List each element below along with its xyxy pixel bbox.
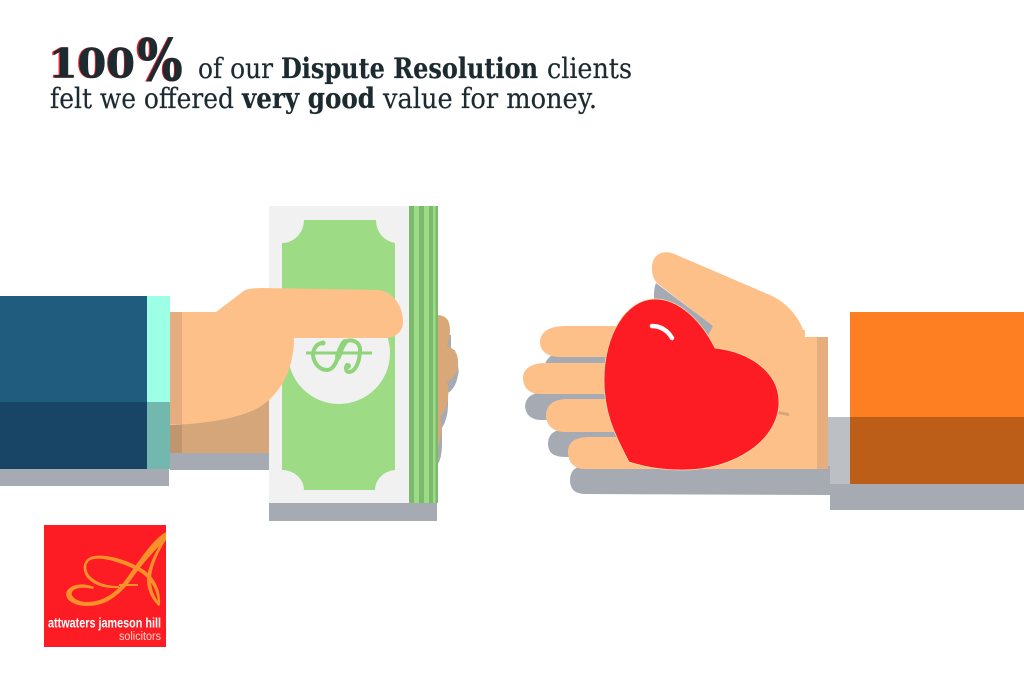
logo descriptor: solicitors	[119, 631, 161, 643]
big number: %	[138, 27, 182, 94]
note edges	[409, 206, 438, 503]
note medallion	[288, 302, 390, 404]
headline	[48, 27, 632, 115]
headline line one: Dispute Resolution	[281, 52, 538, 85]
heart highlight	[652, 326, 672, 338]
right sleeve	[850, 312, 1024, 484]
left sleeve	[0, 296, 147, 469]
right hand	[523, 252, 828, 469]
left hand fingers behind banknote	[437, 315, 459, 466]
left cuff	[147, 296, 170, 469]
logo background	[44, 525, 166, 647]
hand shadow left	[170, 453, 270, 470]
headline line two: very good	[241, 82, 375, 115]
headline line two: value for money.	[382, 82, 597, 115]
big number red offset	[48, 27, 182, 94]
headline line one: of our	[198, 52, 274, 85]
sleeve shadow left	[0, 469, 169, 486]
big number red offset: 100	[48, 40, 134, 88]
heart	[604, 299, 779, 470]
logo firm name: attwaters jameson hill	[48, 616, 161, 630]
big number red offset: %	[136, 27, 182, 94]
note paper	[269, 206, 409, 503]
dollar sign	[306, 340, 372, 372]
headline line one: clients	[547, 52, 632, 85]
note shadow	[269, 503, 437, 521]
big number	[49, 27, 182, 94]
right hand shadows	[525, 283, 830, 495]
big number: 100	[49, 40, 135, 88]
hand underside	[170, 400, 270, 453]
logo monogram A	[66, 532, 166, 606]
note green face	[282, 220, 395, 490]
right sleeve shadow	[828, 417, 1024, 510]
headline line two: felt we offered	[50, 82, 234, 115]
logo	[44, 525, 166, 647]
banknote stack	[269, 206, 438, 521]
left hand pointing finger	[170, 288, 403, 425]
